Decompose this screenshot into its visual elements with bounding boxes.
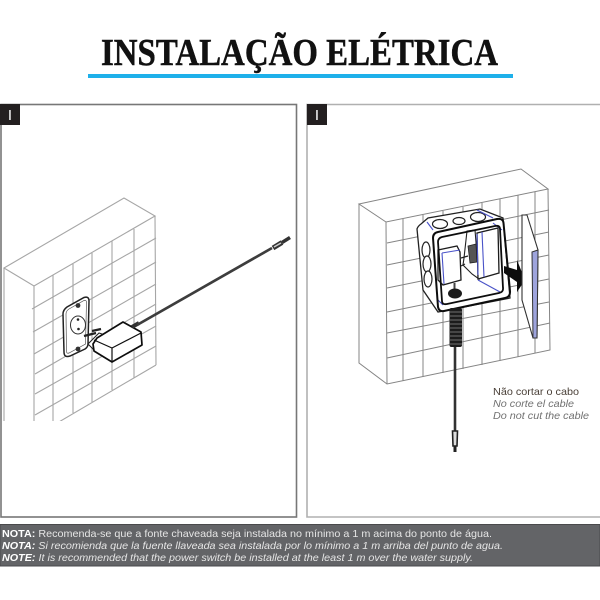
panel: right junction-box installation	[307, 104, 600, 517]
title: INSTALAÇÃO ELÉTRICA	[101, 32, 498, 74]
corrugated conduit and cable	[449, 308, 462, 452]
left adapter	[438, 246, 461, 285]
cable warning text: No corte el cable	[493, 398, 574, 410]
panel tag: left: I	[8, 107, 12, 124]
title underline	[88, 74, 513, 78]
panel tag: right: I	[315, 107, 319, 124]
note bar: NOTA: Si recomienda que la fuente llaveada sea instalada por lo mínimo a 1 m arriba del punto de agua.	[2, 540, 503, 552]
right adapter	[477, 228, 499, 279]
cable warning text: Do not cut the cable	[493, 410, 589, 422]
panel: left wall-socket installation	[0, 104, 296, 517]
front frame	[433, 219, 510, 311]
note bar: NOTE: It is recommended that the power switch be installed at the least 1 m over the water supply.	[2, 552, 473, 564]
junction box	[417, 209, 510, 312]
central mounting plate	[463, 230, 479, 279]
cable with connector	[132, 238, 290, 327]
cover plate	[522, 215, 538, 338]
note bar	[0, 524, 600, 566]
cable warning text	[493, 386, 589, 422]
wall with tile grid	[4, 198, 156, 436]
icon: wall socket plate	[63, 297, 89, 356]
note bar: NOTA: Recomenda-se que a fonte chaveada seja instalada no mínimo a 1 m acima do ponto de água.	[2, 528, 492, 540]
cover plate blue edge	[532, 250, 538, 338]
icon: arrow	[504, 260, 525, 292]
knockouts	[422, 212, 486, 287]
wall with tile grid	[359, 169, 550, 384]
blue box edges	[427, 210, 502, 305]
icon: power adapter	[84, 322, 142, 362]
cable nut	[454, 283, 456, 290]
panel tag: right	[307, 104, 327, 125]
cable warning text: Não cortar o cabo	[493, 386, 579, 398]
panel tag: left	[0, 104, 20, 125]
